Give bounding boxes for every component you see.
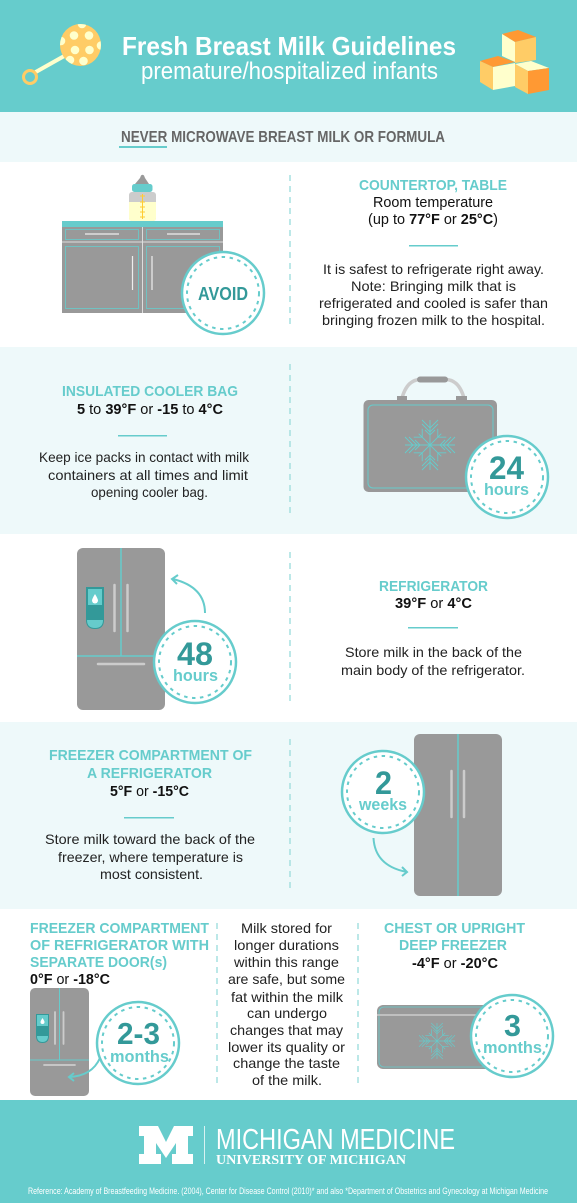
badge: 2 weeks: 2 [375, 765, 392, 801]
text: refrigerator guidance: 39°F or 4°C [395, 596, 473, 612]
text: freezer guidance: freezer, where temperature is [58, 849, 243, 865]
badge: 48 hours: 48 [177, 636, 213, 672]
text: storage note: changes that may [230, 1022, 343, 1038]
text: freezer guidance: A REFRIGERATOR [87, 765, 212, 782]
text: deep freezer: -4°F or -20°C [412, 956, 499, 972]
text: storage note: fat within the milk [231, 989, 344, 1005]
text: refrigerator guidance [341, 578, 525, 678]
text: countertop guidance: It is safest to refrigerate right away. [323, 261, 544, 277]
icon: cooler bag [364, 376, 497, 492]
badge: 24 hours: hours [484, 480, 529, 499]
logo: block M [139, 1126, 193, 1164]
text: deep freezer [384, 920, 525, 972]
text: separate door freezer: 0°F or -18°C [30, 972, 111, 988]
text: countertop guidance: bringing frozen milk to the hospital. [322, 312, 545, 328]
text: cooler guidance: containers at all times and limit [48, 467, 248, 483]
text: cooler guidance: opening cooler bag. [91, 484, 208, 500]
text: countertop guidance: Room temperature [373, 195, 493, 211]
logo: Michigan Medicine wordmark: UNIVERSITY OF MICHIGAN [216, 1153, 406, 1168]
text: storage note: Milk stored for [241, 920, 332, 936]
icon: kitchen cabinet [62, 221, 223, 313]
text: storage note: are safe, but some [228, 971, 345, 987]
badge: 2 weeks: weeks [358, 795, 407, 814]
icon: french door refrigerator [77, 548, 165, 710]
warning text: NEVER MICROWAVE BREAST MILK OR FORMULA [121, 129, 445, 146]
badge: 2-3 months [97, 1002, 179, 1084]
logo: Michigan Medicine wordmark: MICHIGAN MEDICINE [216, 1124, 455, 1156]
badge: 48 hours [154, 621, 236, 703]
badge: 2-3 months: months [110, 1047, 169, 1066]
badge: 48 hours: hours [173, 666, 218, 685]
heading: subtitle: premature/hospitalized infants [141, 58, 438, 85]
panel: long-term freezers [0, 909, 577, 1100]
text: cooler guidance: 5 to 39°F or -15 to 4°C [77, 402, 224, 418]
text: freezer guidance: Store milk toward the back of the [45, 831, 255, 847]
icon: baby rattle [24, 20, 105, 84]
text: freezer guidance: FREEZER COMPARTMENT OF [49, 747, 252, 764]
text: separate door freezer: SEPARATE DOOR(s) [30, 954, 167, 971]
icon: side-by-side freezer [414, 734, 502, 896]
text: refrigerator guidance: Store milk in the back of the [345, 644, 522, 660]
text: refrigerator guidance: main body of the refrigerator. [341, 662, 525, 678]
text: separate door freezer [30, 920, 209, 988]
badge: 24 hours [466, 436, 548, 518]
text: freezer guidance [45, 747, 255, 882]
panel: header [0, 0, 577, 112]
panel: refrigerator [0, 534, 577, 722]
arrow: to freezer [374, 838, 407, 876]
text: countertop guidance: refrigerated and cooled is safer than [319, 295, 548, 311]
badge: avoid [182, 252, 264, 334]
text: countertop guidance: Note: Bringing milk that is [351, 278, 516, 294]
badge: 3 months [471, 995, 553, 1077]
panel: microwave warning [0, 112, 577, 162]
text: storage note: change the taste [233, 1055, 340, 1071]
badge: 2-3 months: 2-3 [117, 1016, 160, 1051]
badge: avoid: AVOID [198, 284, 248, 304]
badge: 2 weeks [342, 751, 424, 833]
text: cooler guidance: Keep ice packs in contact with milk [39, 449, 250, 465]
text: freezer guidance: 5°F or -15°C [110, 784, 190, 800]
arrow: to small refrigerator [69, 1058, 100, 1081]
text: separate door freezer: OF REFRIGERATOR WITH [30, 937, 209, 954]
text: storage note: can undergo [247, 1005, 327, 1021]
text: cooler guidance: INSULATED COOLER BAG [62, 383, 238, 400]
icon: baby bottle [129, 175, 156, 221]
panel: freezer compartment [0, 722, 577, 909]
icon: toy blocks [480, 30, 549, 94]
panel: countertop [0, 162, 577, 347]
badge: 3 months: 3 [504, 1008, 521, 1043]
icon: small refrigerator [30, 988, 89, 1096]
icon: chest freezer [377, 1005, 502, 1069]
text: deep freezer: DEEP FREEZER [399, 937, 507, 954]
text: storage note: longer durations [234, 937, 339, 953]
logo: Michigan Medicine wordmark [216, 1124, 455, 1168]
heading: title: Fresh Breast Milk Guidelines [122, 31, 456, 61]
text: countertop guidance: COUNTERTOP, TABLE [359, 177, 507, 194]
arrow: to refrigerator [172, 575, 205, 613]
badge: 3 months: months [483, 1038, 542, 1057]
panel: footer [0, 1100, 577, 1203]
text: storage note: of the milk. [252, 1072, 322, 1088]
text: separate door freezer: FREEZER COMPARTMENT [30, 920, 209, 937]
text: cooler guidance [39, 383, 250, 500]
text: deep freezer: CHEST OR UPRIGHT [384, 920, 525, 937]
text: storage note: within this range [233, 954, 339, 970]
text: countertop guidance [319, 177, 548, 328]
text: refrigerator guidance: REFRIGERATOR [379, 578, 488, 595]
text: countertop guidance: (up to 77°F or 25°C) [368, 212, 498, 228]
text: storage note [228, 920, 345, 1088]
text: freezer guidance: most consistent. [100, 866, 203, 882]
panel: insulated cooler bag [0, 347, 577, 534]
badge: 24 hours: 24 [489, 450, 524, 486]
text: storage note: lower its quality or [228, 1039, 345, 1055]
